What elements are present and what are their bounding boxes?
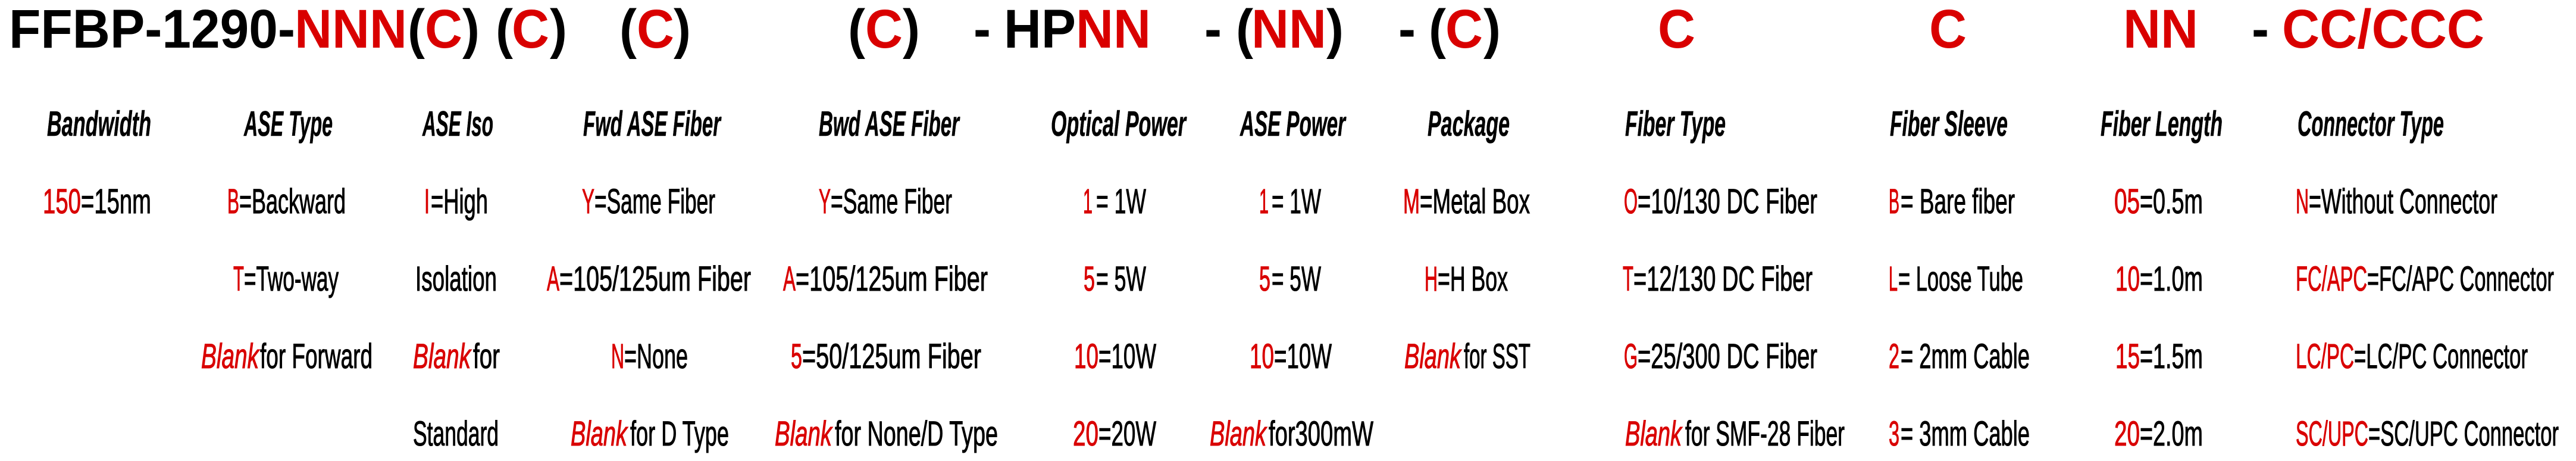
option: A: A (547, 260, 559, 298)
option: T: =12/130 DC Fiber (1633, 260, 1813, 298)
option: Y: =Same Fiber (594, 182, 715, 221)
heading: Package: Package (1428, 104, 1510, 144)
option: M (1403, 182, 1530, 221)
option: O: O (1624, 182, 1638, 221)
column: Connector Type (2296, 104, 2559, 453)
option: Blank: for (473, 337, 500, 376)
option: SC/UPC (2296, 415, 2559, 453)
column: Fwd ASE Fiber (547, 104, 751, 453)
title: part number code: C (1929, 0, 1967, 60)
option: N (611, 337, 688, 376)
option: Blank: Blank (413, 337, 472, 376)
column: ASE Type (201, 104, 373, 376)
option: Blank: Blank (1404, 337, 1462, 376)
option: 1 (1083, 182, 1146, 221)
option: T: =Two-way (244, 260, 339, 298)
title: part number code: NNN (295, 0, 407, 60)
column: ASE Power (1210, 104, 1373, 453)
title: part number code (9, 0, 2484, 60)
option: 3: 3 (1889, 415, 1899, 453)
option: SC/UPC: SC/UPC (2296, 415, 2368, 453)
option: 1: 1 (1083, 182, 1093, 221)
title: part number code: C (637, 0, 674, 60)
option: LC/PC: LC/PC (2296, 337, 2354, 376)
option: 20: =2.0m (2140, 415, 2203, 453)
option: Blank: for SMF-28 Fiber (1685, 415, 1845, 453)
option: 3: = 3mm Cable (1901, 415, 2030, 453)
option: 20 (1073, 415, 1156, 453)
heading: ASE Type: ASE Type (243, 104, 333, 144)
column: Fiber Length (2101, 104, 2223, 453)
option: H: =H Box (1438, 260, 1508, 298)
option: A (783, 260, 988, 298)
option: 5: 5 (791, 337, 802, 376)
option: 15: =1.5m (2140, 337, 2203, 376)
title: part number code: - (2252, 0, 2269, 60)
option: 1: = 1W (1272, 182, 1321, 221)
option: Y: Y (819, 182, 831, 221)
title: part number code: C (512, 0, 549, 60)
option: 5: 5 (1259, 260, 1270, 298)
title: part number code: NN (2123, 0, 2198, 60)
option: FC/APC (2296, 260, 2554, 298)
title: part number code: ( (1236, 0, 1253, 60)
title: part number code: C (425, 0, 462, 60)
title: part number code: C (1445, 0, 1483, 60)
column: Fiber Sleeve (1889, 104, 2030, 453)
option: H: H (1425, 260, 1438, 298)
option: N: =None (624, 337, 688, 376)
option: 05: 05 (2114, 182, 2140, 221)
title: part number code: ( (619, 0, 637, 60)
title: part number code: CC/CCC (2282, 0, 2484, 60)
option: 10: =1.0m (2140, 260, 2203, 298)
option: Blank: for None/D Type (835, 415, 998, 453)
option: 20: 20 (2114, 415, 2140, 453)
title: part number code: - (1398, 0, 1416, 60)
option: Blank: Blank (775, 415, 833, 453)
option: 3 (1889, 415, 2030, 453)
option: L: L (1889, 260, 1898, 298)
title: part number code: ( (408, 0, 425, 60)
option: 10: 10 (2115, 260, 2140, 298)
option: L: = Loose Tube (1898, 260, 2023, 298)
option: 5 (1084, 260, 1146, 298)
title: part number code: ( (848, 0, 865, 60)
option: 10 (1250, 337, 1332, 376)
option text: Standard: Standard (413, 415, 499, 453)
option: 10 (2115, 260, 2203, 298)
title: part number code: NN (1251, 0, 1326, 60)
option: B (227, 182, 346, 221)
heading: ASE Iso: ASE Iso (422, 104, 493, 144)
option: 5 (1259, 260, 1321, 298)
option: 1: = 1W (1096, 182, 1146, 221)
option: Blank: Blank (571, 415, 628, 453)
option: B: = Bare fiber (1901, 182, 2015, 221)
option: A: A (783, 260, 796, 298)
heading: Optical Power: Optical Power (1051, 104, 1187, 144)
option: T (233, 260, 339, 298)
option: Blank: for Forward (260, 337, 373, 376)
option: Y: Y (582, 182, 594, 221)
option: 5: = 5W (1096, 260, 1146, 298)
option: A: =105/125um Fiber (796, 260, 988, 298)
heading: ASE Power: ASE Power (1240, 104, 1347, 144)
option: T: T (1623, 260, 1633, 298)
heading: Connector Type: Connector Type (2298, 104, 2444, 144)
title: part number code: ( (496, 0, 513, 60)
title: part number code: C (865, 0, 903, 60)
option: 10: =10W (1274, 337, 1332, 376)
title: part number code: FFBP-1290- (9, 0, 295, 60)
option: H (1425, 260, 1508, 298)
option: Blank (775, 415, 998, 453)
option: Blank: for SST (1464, 337, 1530, 376)
title: part number code: ) (1326, 0, 1344, 60)
option: Blank (1404, 337, 1530, 376)
option: T: T (233, 260, 244, 298)
option: A (547, 260, 751, 298)
option: 150: 150 (43, 182, 81, 221)
option: 20: 20 (1073, 415, 1098, 453)
option: I: =High (431, 182, 488, 221)
option: O (1624, 182, 1817, 221)
title: part number code: - (1204, 0, 1222, 60)
option: Y (819, 182, 952, 221)
option: N (2296, 182, 2497, 221)
option: Blank: for D Type (630, 415, 729, 453)
option: 15 (2115, 337, 2203, 376)
option: Blank: for300mW (1269, 415, 1373, 453)
title: part number code: HP (1004, 0, 1076, 60)
heading: Bwd ASE Fiber: Bwd ASE Fiber (819, 104, 960, 144)
option text: Isolation: Isolation (415, 260, 497, 298)
option: Blank (1625, 415, 1845, 453)
option: 15: 15 (2115, 337, 2140, 376)
option: T (1623, 260, 1813, 298)
option: Blank: Blank (201, 337, 260, 376)
title: part number code: ) (1483, 0, 1501, 60)
option: Blank: Blank (1210, 415, 1267, 453)
option: Blank (571, 415, 729, 453)
title: part number code: ) (903, 0, 920, 60)
heading: Fwd ASE Fiber: Fwd ASE Fiber (583, 104, 722, 144)
option: I: I (424, 182, 430, 221)
title: part number code: ) (674, 0, 691, 60)
column: Package (1403, 104, 1530, 376)
option: 10: 10 (1074, 337, 1098, 376)
column: Fiber Type (1623, 104, 1845, 453)
column: ASE Iso (413, 104, 500, 453)
column: Bandwidth (43, 104, 151, 221)
option: O: =10/130 DC Fiber (1638, 182, 1817, 221)
option: 05 (2114, 182, 2203, 221)
option: 5: = 5W (1272, 260, 1321, 298)
option: 2: 2 (1889, 337, 1899, 376)
option: 20 (2114, 415, 2203, 453)
option: LC/PC (2296, 337, 2528, 376)
option: Blank (1210, 415, 1373, 453)
option: 10: =10W (1098, 337, 1156, 376)
option: 1: 1 (1259, 182, 1269, 221)
option: I (424, 182, 488, 221)
option: FC/APC: FC/APC (2296, 260, 2367, 298)
option: 2 (1889, 337, 2030, 376)
title: part number code: NN (1076, 0, 1151, 60)
title: part number code: - (974, 0, 991, 60)
option: Blank: Blank (1625, 415, 1683, 453)
heading: Fiber Sleeve: Fiber Sleeve (1890, 104, 2008, 144)
option: B: B (1889, 182, 1899, 221)
option: 10: 10 (1250, 337, 1274, 376)
title: part number code: ) (550, 0, 567, 60)
heading: Fiber Type: Fiber Type (1625, 104, 1726, 144)
option: L (1889, 260, 2023, 298)
option: G: G (1624, 337, 1638, 376)
option: B: B (227, 182, 239, 221)
title: part number code: C (1658, 0, 1695, 60)
option: N: N (611, 337, 624, 376)
option: 10 (1074, 337, 1156, 376)
column: Bwd ASE Fiber (775, 104, 998, 453)
option: 150 (43, 182, 151, 221)
option: 5 (791, 337, 981, 376)
option: 5: 5 (1084, 260, 1095, 298)
heading: Fiber Length: Fiber Length (2101, 104, 2223, 144)
option: Y: =Same Fiber (831, 182, 952, 221)
column: Optical Power (1051, 104, 1187, 453)
option: Y (582, 182, 715, 221)
option: 150: =15nm (81, 182, 151, 221)
option: Blank (201, 337, 373, 376)
option: 1 (1259, 182, 1321, 221)
option: G: =25/300 DC Fiber (1638, 337, 1817, 376)
option: B (1889, 182, 2015, 221)
option: 20: =20W (1098, 415, 1156, 453)
option: N: N (2296, 182, 2309, 221)
option: 5: =50/125um Fiber (802, 337, 981, 376)
title: part number code: ) (462, 0, 480, 60)
option: 05: =0.5m (2140, 182, 2203, 221)
option: 2: = 2mm Cable (1901, 337, 2030, 376)
option: A: =105/125um Fiber (559, 260, 751, 298)
option: B: =Backward (239, 182, 346, 221)
heading: Bandwidth: Bandwidth (47, 104, 151, 144)
option: G (1624, 337, 1817, 376)
title: part number code: ( (1429, 0, 1446, 60)
option: M: =Metal Box (1420, 182, 1530, 221)
option: M: M (1403, 182, 1420, 221)
